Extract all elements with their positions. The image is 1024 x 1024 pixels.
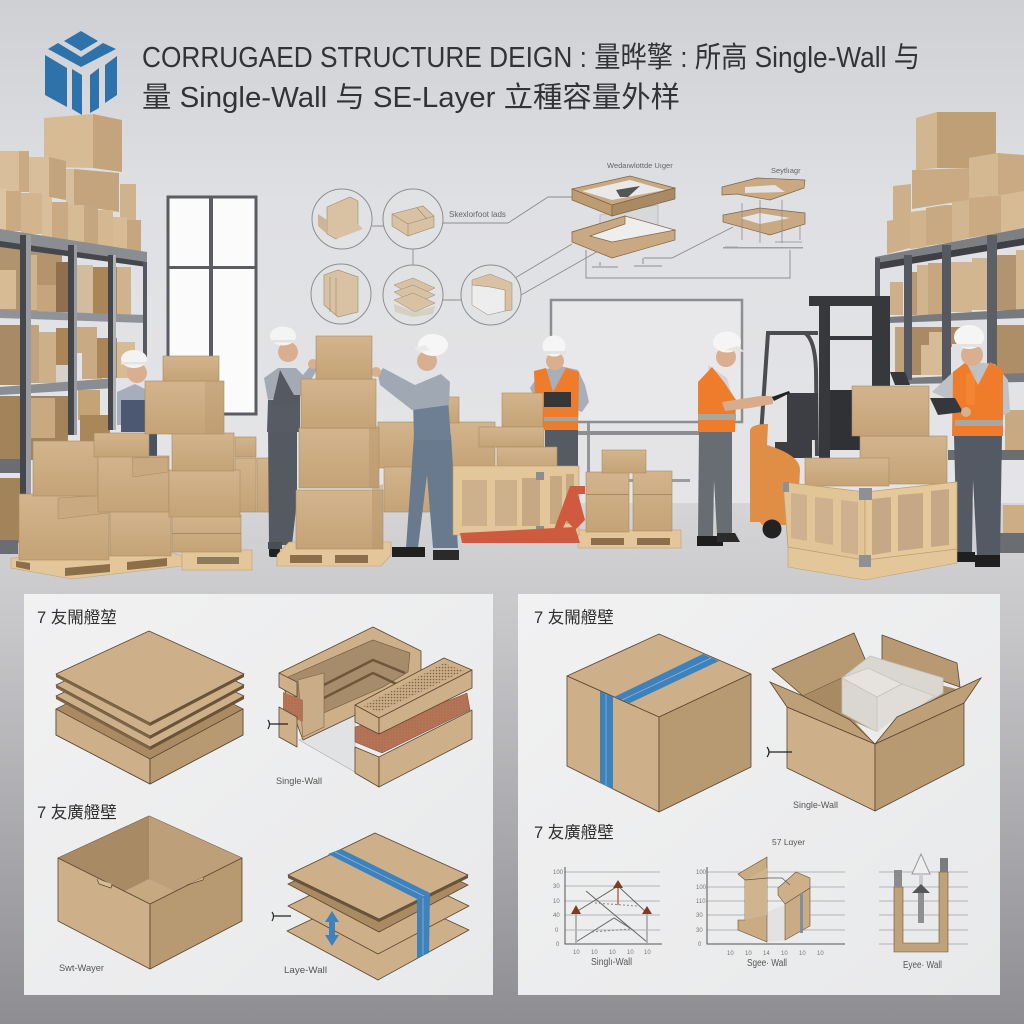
y axis ticks: 10 — [553, 899, 560, 905]
worker: right with clipboard — [930, 325, 1010, 567]
open box with contents — [770, 633, 981, 811]
y axis ticks: 0 — [556, 942, 560, 948]
heading: bottom-right section: 7 友廣艠壁 — [534, 823, 614, 842]
worker: left, lifting box stack — [264, 326, 319, 557]
sketch label left: Skexlorfoot lads — [449, 210, 506, 219]
worker: right of stack, blue overalls — [371, 334, 459, 560]
wooden crate — [453, 466, 579, 535]
forklift overhead guard — [761, 333, 818, 456]
label: Sgee Wall chart: Sgee· Wall — [747, 958, 787, 969]
interior — [803, 666, 960, 744]
label: Laye-Wall: Laye-Wall — [284, 965, 327, 976]
panel: right — [518, 594, 1000, 995]
crate faces — [783, 482, 957, 567]
forklift orange body — [750, 424, 800, 525]
sketch label middle: Wedaıwlottde Uıger — [607, 161, 673, 170]
chart: section drawing — [696, 857, 845, 957]
small clipboard tablet near shelf — [890, 372, 910, 385]
label: Single-Wall: Single-Wall — [793, 800, 838, 811]
x axis ticks: 10 — [591, 950, 598, 956]
panel: left — [24, 594, 493, 995]
blue double arrow — [325, 911, 339, 946]
crate right with boxes — [783, 386, 957, 580]
shelf uprights and boards — [0, 229, 147, 554]
small box stack on pallet — [586, 450, 672, 532]
logo icon: blue cube — [45, 31, 117, 115]
pallet: small boxes — [578, 530, 681, 548]
circle 2: taped box — [383, 189, 443, 249]
warehouse wall background — [0, 0, 1024, 510]
boxes stacked on top of right shelf — [887, 112, 1024, 254]
chart: section drawing: 0 — [698, 942, 702, 948]
chart: section drawing: 10 — [727, 951, 734, 957]
box stack B — [94, 433, 171, 556]
chart: section drawing: 100 — [696, 870, 707, 876]
box stack D (center column) — [296, 336, 383, 549]
forklift mast — [809, 296, 890, 460]
back tray — [279, 627, 421, 740]
front faces — [787, 707, 875, 811]
blue tape side — [417, 893, 430, 958]
right shelving with boxes — [875, 112, 1024, 553]
sketch label right: Seytlıagr — [771, 166, 801, 175]
circle 5: open frame — [461, 265, 521, 325]
x axis ticks: 10 — [609, 950, 616, 956]
y axis ticks: 0 — [555, 928, 559, 934]
chart: section drawing: 100 — [696, 885, 707, 891]
closed box with blue tape — [567, 634, 751, 812]
x axis ticks — [573, 950, 651, 956]
label: Single-Wall chart: Singlı-Wall — [591, 957, 632, 968]
worker: back left, holding box — [117, 350, 159, 456]
tape on side — [600, 691, 613, 789]
whiteboard — [551, 300, 742, 508]
title: CORRUGAED STRUCTURE DEIGN : 量晔擎 : 所高 Single-Wall 与 — [142, 41, 920, 74]
label: Eyee Wall chart: Eyee· Wall — [903, 960, 942, 971]
y axis ticks: 30 — [553, 884, 560, 890]
arrow marker — [272, 912, 291, 921]
chart: Single-Wall load lines — [553, 867, 662, 956]
pallet: mid left — [182, 550, 252, 570]
middle frames drawing — [572, 176, 675, 267]
heading: bottom-left section: 7 友廣艠壁 — [37, 803, 117, 822]
y axis ticks: 40 — [553, 913, 560, 919]
chart: U section drawing — [879, 854, 968, 952]
title — [142, 41, 920, 114]
open box — [58, 816, 242, 969]
x axis ticks: 10 — [573, 950, 580, 956]
chart: section drawing: 14 — [763, 951, 770, 957]
box stack A — [19, 441, 109, 560]
forklift — [750, 296, 890, 538]
sketch diagram on wall — [311, 161, 805, 325]
chart: section drawing: 10 — [745, 951, 752, 957]
back flaps — [772, 633, 868, 696]
pallet under right crate — [788, 547, 957, 580]
chart: section drawing: 30 — [696, 913, 703, 919]
lower box — [355, 747, 379, 787]
background box stacks — [235, 397, 495, 512]
worker: with tablet near forklift — [697, 332, 790, 546]
left shelving with boxes — [0, 114, 147, 554]
front long beam — [355, 693, 470, 753]
label: 57 Layer: 57 Lɑyer — [772, 837, 805, 847]
shelf contents — [0, 247, 135, 543]
boxes on crate — [479, 393, 557, 471]
translucent contents — [842, 656, 943, 732]
x axis ticks: 10 — [627, 950, 634, 956]
chart: section drawing: 10 — [781, 951, 788, 957]
pallet: left long — [11, 552, 182, 579]
stacked corrugated sheets — [56, 631, 244, 784]
label: Single-Wall: Single-Wall — [276, 776, 322, 787]
glass base — [299, 710, 355, 772]
circle 4: layered sheets — [383, 265, 443, 325]
left post — [279, 673, 297, 697]
chart: section drawing: 10 — [817, 951, 824, 957]
x axis ticks: 10 — [644, 950, 651, 956]
chart: section drawing: 10 — [799, 951, 806, 957]
right frames drawing — [722, 178, 805, 248]
worker: center with clipboard — [530, 336, 589, 470]
boxes on right crate — [805, 386, 947, 486]
connector lines — [372, 197, 790, 300]
blue tape top — [328, 849, 430, 899]
warehouse floor — [0, 503, 1024, 1024]
right shelf uprights and boards — [875, 228, 1024, 553]
chart: section drawing: 110 — [696, 899, 706, 905]
pallet: center — [277, 542, 391, 566]
window — [168, 197, 256, 414]
y axis ticks — [553, 870, 564, 948]
arrow marker — [268, 720, 288, 729]
forklift seat — [775, 393, 818, 458]
heading: top-left section: 7 友閙艠堃 — [37, 608, 117, 627]
front flaps — [770, 682, 875, 744]
box stack C — [145, 356, 241, 552]
chart: section drawing: 30 — [696, 928, 703, 934]
label: Swt-Wayer: Swt-Wayer — [59, 963, 104, 974]
layered sheets with blue tape — [287, 833, 469, 980]
title: 量 Single-Wall 与 SE-Layer 立種容量外样 — [142, 81, 680, 114]
clear card — [298, 673, 324, 737]
right shelf contents — [890, 250, 1024, 540]
crate center with stacked boxes — [453, 393, 585, 543]
forklift wheel — [762, 520, 782, 538]
boxes stacked on top of left shelf — [0, 114, 141, 254]
circle 3: tall box — [311, 264, 371, 324]
tape on top — [614, 654, 719, 703]
cutaway wall structure — [279, 627, 472, 787]
left box stacks — [19, 336, 383, 560]
arrow marker — [767, 747, 792, 757]
y axis ticks: 100 — [553, 870, 564, 876]
heading: top-right section: 7 友閙艠壁 — [534, 608, 614, 627]
circle 1: box — [312, 189, 372, 249]
red pallet jack — [460, 486, 585, 543]
